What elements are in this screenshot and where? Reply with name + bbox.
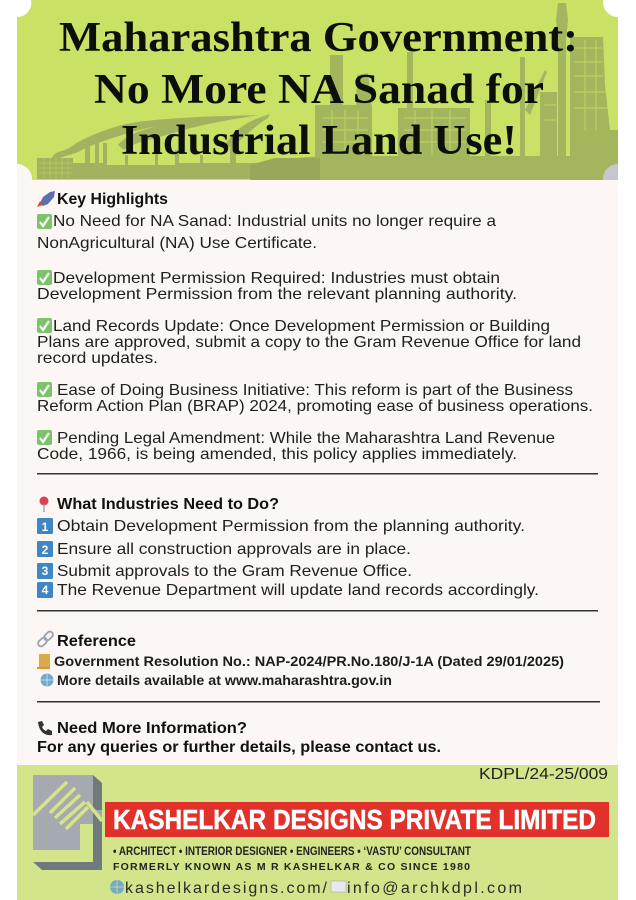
highlight 4: Ease of Doing Business Initiative: This reform is part of the Business [57,382,573,399]
logo stripes [33,782,102,829]
services line: • ARCHITECT • INTERIOR DESIGNER • ENGINEERS • ‘VASTU’ CONSULTANT [113,844,472,858]
highlight 2: Development Permission from the relevant planning authority. [37,286,517,303]
highlight 4: Reform Action Plan (BRAP) 2024, promoting ease of business operations. [37,398,593,415]
step 4: The Revenue Department will update land records accordingly. [57,582,539,599]
highlight 3: record updates. [37,350,158,367]
details line: More details available at www.maharashtra.gov.in [57,673,392,688]
section: key highlights [37,191,593,463]
highlight 5: Pending Legal Amendment: While the Maharashtra Land Revenue [57,430,555,447]
step 4: 4 [42,583,49,597]
step 3: Submit approvals to the Gram Revenue Office. [57,563,412,580]
left building windows [39,158,72,178]
step 2: Ensure all construction approvals are in place. [57,541,411,558]
notch shade [603,164,618,180]
highlight 1: No Need for NA Sanad: Industrial units no longer require a [53,213,496,230]
icon: link [37,630,54,648]
title: Industrial Land Use! [121,118,517,164]
document number: KDPL/24-25/009 [479,766,608,783]
highlight 5 [37,430,555,463]
left factories [37,114,272,179]
step 3: 3 [42,564,49,578]
logo [33,775,102,870]
former name line: FORMERLY KNOWN AS M R KASHELKAR & CO SINCE 1980 [113,861,470,873]
highlight 1: NonAgricultural (NA) Use Certificate. [37,235,317,252]
header banner [17,0,618,180]
contact row [110,880,522,897]
footer panel [17,765,618,900]
heading: need more information: Need More Information? [57,720,247,737]
lattice tower block [570,37,618,160]
highlight 2 [37,270,517,303]
step 1: Obtain Development Permission from the planning authority. [57,518,525,535]
step 2: 2 [42,543,49,557]
heading: key highlights: Key Highlights [57,191,168,208]
logo face [33,775,102,862]
dark ground [250,158,320,180]
title: Maharashtra Government: [59,15,578,61]
step 1: 1 [42,520,49,534]
highlight 3 [37,318,581,367]
highlight 4 [37,382,593,415]
section: reference [37,630,564,688]
highlight 2: Development Permission Required: Industries must obtain [53,270,500,287]
logo side and base [33,775,102,870]
right ground band [272,156,618,180]
icon: globe [40,674,54,686]
icon: pin [40,496,48,512]
icon: refinery skyline [37,3,618,180]
highlight 3: Plans are approved, submit a copy to the Gram Revenue Office for land [37,334,581,351]
icon: phone [38,721,52,735]
heading: reference: Reference [57,633,136,650]
lattice gaps [322,40,608,155]
section: what industries need to do [37,496,539,599]
highlight 3: Land Records Update: Once Development Permission or Building [53,318,550,335]
tall tower [556,3,568,160]
title: No More NA Sanad for [94,67,544,113]
icon: rocket [37,191,55,207]
highlight 1 [37,213,496,252]
content panel [17,165,618,770]
highlight 5: Code, 1966, is being amended, this policy applies immediately. [37,446,517,463]
title [59,15,578,164]
contact line: For any queries or further details, please contact us. [37,739,441,756]
icon: scroll [37,654,50,669]
heading: what industries: What Industries Need to Do? [57,496,279,513]
contact row: info@archkdpl.com [347,880,522,897]
section: contact [37,720,441,756]
resolution line: Government Resolution No.: NAP-2024/PR.No.180/J-1A (Dated 29/01/2025) [54,654,564,669]
contact row: kashelkardesigns.com/ [125,880,328,897]
